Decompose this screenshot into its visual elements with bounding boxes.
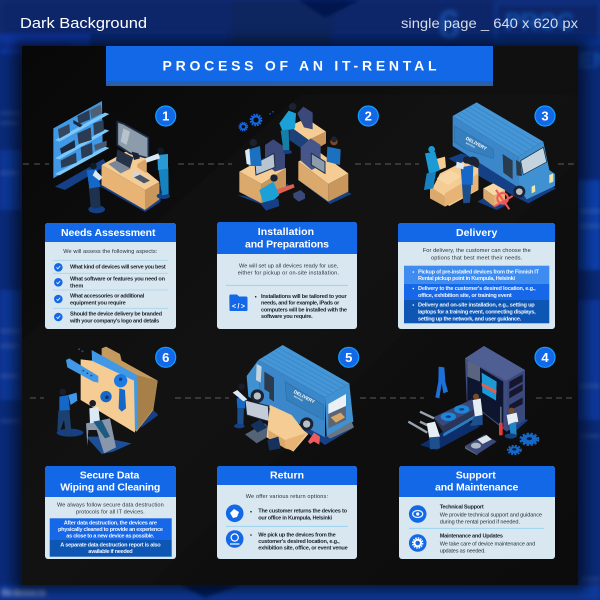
blurred background: PROC [505,9,574,36]
blurred background: the devices to [2,590,45,597]
panel: secure data wiping: After data destruction, the devices are [64,520,157,526]
panel: delivery: Delivery to the customer's desired location, e.g., [418,286,536,292]
illustration: installation team [237,103,352,211]
panel: return: Return [270,470,304,482]
panel: secure data wiping: available if needed [88,549,133,555]
panel: return: We pick up the devices from the [258,532,336,538]
panel: support and maintenance: We provide technical support and guidance [440,512,542,518]
panel: secure data wiping: We always follow secure data destruction [57,502,164,508]
panel: needs assessment: Should the device delivery be branded [70,312,163,318]
badge 2: 2 [365,109,372,124]
illustration: needs assessment showroom [53,101,170,213]
illustration: return van [233,345,354,452]
badge 1 [156,106,176,126]
panel: installation and preparations: needs, and for example, iPads or [261,301,340,307]
panel: secure data wiping: A separate data destruction report is also [60,543,161,549]
panel: secure data wiping: Wiping and Cleaning [60,482,160,494]
panel: support and maintenance: during the rental period if needed. [440,519,520,525]
panel: installation and preparations: either for pickup or on-site installation. [238,271,339,277]
badge 3 [535,106,555,126]
panel: secure data wiping: protocols for all IT devices. [76,509,145,515]
panel: support and maintenance: updates as needed. [440,548,486,554]
badge 1: 1 [162,109,169,124]
panel: support and maintenance: Support [456,470,496,482]
panel: needs assessment: What software or features you need on [70,276,166,282]
panel: needs assessment: with your company's logo and details [69,318,159,324]
badge 2 [358,106,378,126]
illustration: delivery van: service [465,141,476,149]
panel: delivery: Delivery and on-site installation, e.g., setting up [418,303,535,309]
panel: support and maintenance: Technical Support [440,505,484,511]
panel: delivery: options that best meet their needs. [431,256,523,262]
panel: needs assessment: Needs Assessment [61,227,156,239]
title banner [106,46,493,86]
panel: support and maintenance [399,466,555,559]
panel: installation and preparations: computers will be installed with the [261,307,347,313]
panel: secure data wiping: physically cleaned to provide an experience [58,527,163,533]
blurred background: 6 [438,3,460,47]
badge 4 [535,347,555,367]
illustration: data wiping folder [57,347,158,454]
panel: support and maintenance: Maintenance and Updates [440,533,503,539]
panel: needs assessment: them [70,283,83,289]
panel: return: exhibition site, office, or event venue [258,546,348,552]
title banner: PROCESS OF AN IT-RENTAL [162,58,437,74]
top label: page size: single page _ 640 x 620 px [401,15,578,31]
panel: return: The customer returns the devices to [258,509,348,515]
panel: delivery: Delivery [456,227,497,239]
illustration: support server repair [408,346,538,455]
panel: delivery: For delivery, the customer can choose the [423,248,531,254]
illustration: return van: DELIVERY [293,389,316,405]
blurred background: Assessment [0,39,71,53]
panel: return: We offer various return options: [246,494,328,500]
top label: Dark Background: Dark Background [20,16,147,32]
illustration: delivery van: DELIVERY [465,136,488,151]
panel: return: our office in Kumpula, Helsinki [258,515,332,521]
panel: installation and preparations: We will set up all devices ready for use, [239,264,339,270]
panel: installation and preparations: and Preparations [245,238,329,250]
icon: code folder: </> [232,304,245,310]
panel: secure data wiping: Secure Data [80,470,139,482]
icon: maintenance gear [409,534,427,552]
illustration: delivery van [424,102,556,210]
panel: delivery: Rental pickup point in Kumpula, Helsinki [418,276,515,282]
icon: technical support [409,505,427,523]
panel: delivery: laptops for a training event, connecting displays, [418,309,536,315]
badge 6: 6 [162,350,169,365]
illustration: return van: service [293,394,304,403]
panel: delivery: office, exhibition site, or training event [418,293,512,299]
panel: installation and preparations: Installations will be tailored to your [261,294,348,300]
panel: return [217,466,357,559]
panel: support and maintenance: We take care of device maintenance and [440,541,535,547]
badge 6 [156,347,176,367]
panel: installation and preparations [217,222,357,329]
icon: return device [226,504,244,522]
panel: needs assessment [45,223,176,329]
panel: delivery [398,223,555,329]
badge 5: 5 [345,350,352,365]
icon: pickup location [226,530,244,548]
panel: needs assessment: equipment you require [70,300,126,306]
panel: needs assessment: What accessories or additional [70,294,145,300]
panel: installation and preparations: software you require. [261,314,313,320]
panel: return: customer's desired location, e.g., [258,539,340,545]
badge 3: 3 [541,109,549,124]
panel: installation and preparations: Installation [258,226,314,238]
badge 5 [339,347,359,367]
panel: secure data wiping: as close to a new device as possible. [66,534,155,540]
panel: delivery: setting up the network, and user guidance. [418,316,522,322]
panel: delivery: Pickup of pre-installed devices from the Finnish IT [418,269,540,275]
panel: support and maintenance: and Maintenance [435,482,518,494]
badge 4: 4 [541,350,549,365]
panel: secure data wiping [45,466,176,559]
panel: needs assessment: What kind of devices will serve you best [70,265,166,271]
panel: needs assessment: We will assess the following aspects: [63,249,158,255]
